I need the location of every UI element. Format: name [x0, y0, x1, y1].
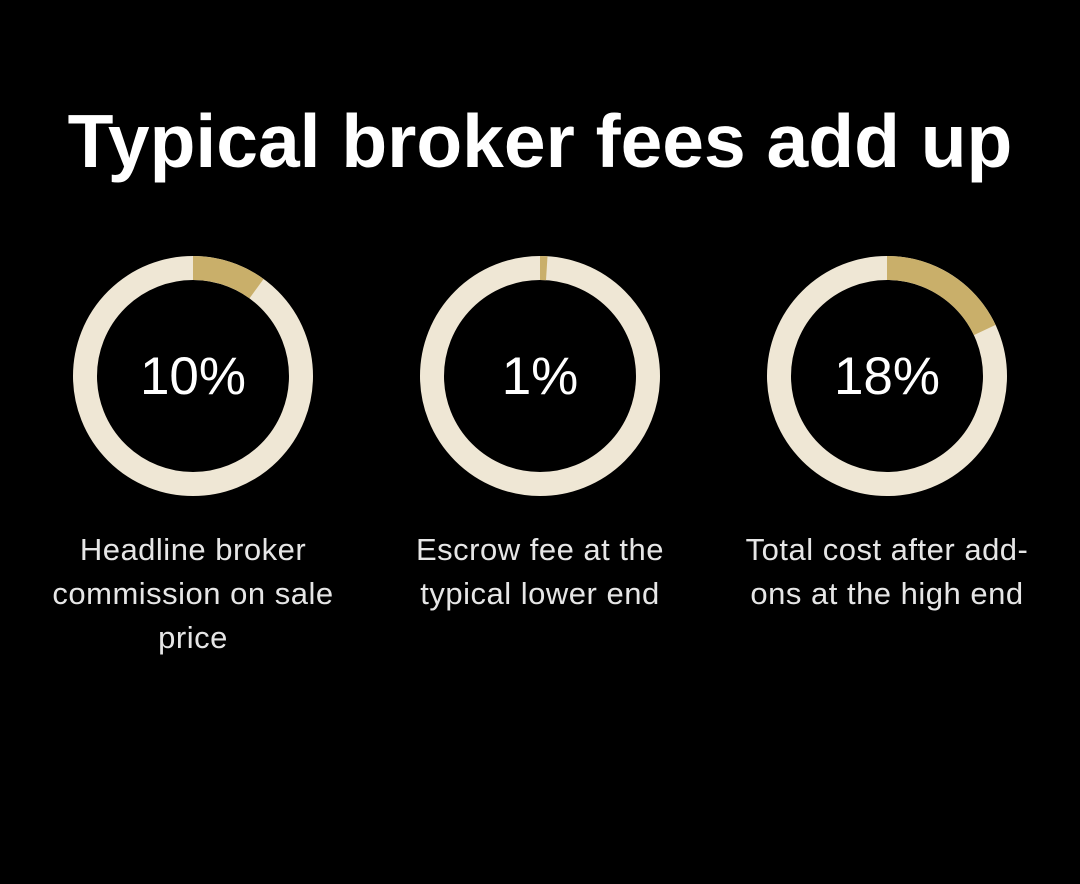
- caption: [416, 532, 664, 611]
- caption: Escrow fee at the: [416, 532, 664, 567]
- value: 1%: [502, 347, 578, 406]
- donut chart: 18%: [767, 256, 1007, 496]
- value: 10%: [140, 347, 246, 406]
- donut chart: 10%: [73, 256, 313, 496]
- value: 18%: [834, 347, 940, 406]
- caption: ons at the high end: [750, 576, 1024, 611]
- caption: typical lower end: [420, 576, 660, 611]
- caption: Total cost after add-: [746, 532, 1028, 567]
- caption: [746, 532, 1028, 611]
- caption: commission on sale: [52, 576, 334, 611]
- caption: price: [158, 620, 228, 655]
- donut chart: 1%: [420, 256, 660, 496]
- caption: Headline broker: [80, 532, 306, 567]
- caption: [52, 532, 334, 655]
- panel: total cost: [746, 256, 1028, 611]
- panel: headline commission: [52, 256, 334, 655]
- title: Typical broker fees add up: [68, 99, 1012, 183]
- panel: escrow fee: [416, 256, 664, 611]
